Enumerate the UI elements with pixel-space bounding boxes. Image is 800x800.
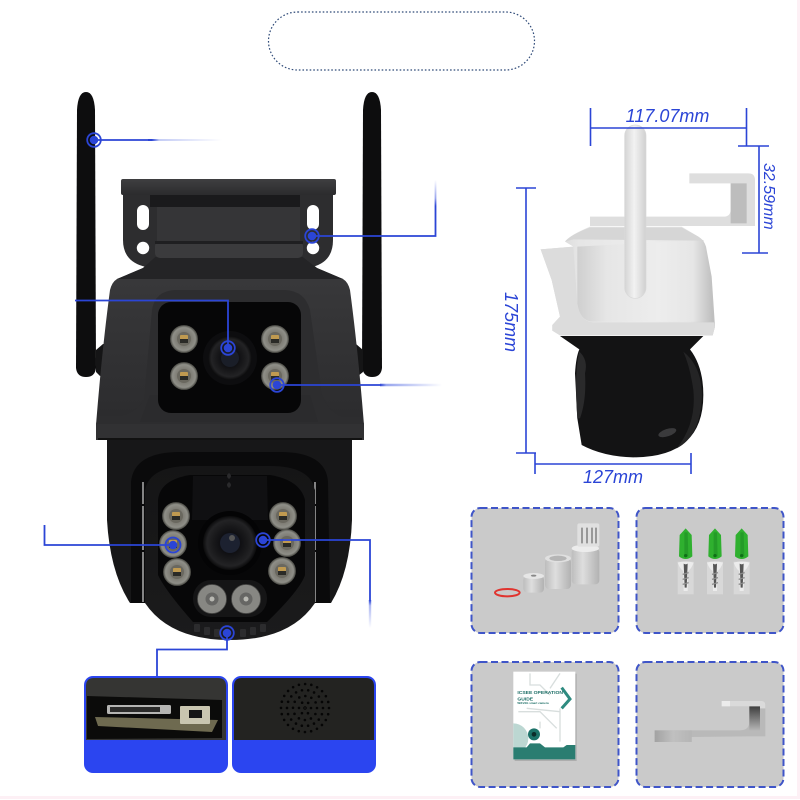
dimension: bracket depth [738,146,777,253]
marker: upper LED [270,378,284,392]
detail photo: memory card slot [84,676,228,773]
accessory panel: waterproof connector kit [472,508,618,633]
side bracket [590,173,755,226]
side antenna [625,125,646,298]
dimension: top width: 117.07mm [626,106,709,126]
side speaker hole [657,426,677,439]
accessory panel: wall anchors and screws [636,508,784,633]
left antenna [76,92,96,377]
dimension: bracket depth: 32.59mm [760,163,777,230]
callout lines and markers [44,133,442,676]
accessory panel: operation guide [472,662,618,787]
marker: lower LED [166,538,180,552]
accessory panel: operation guide: GUIDE [517,696,534,702]
marker: bracket [305,229,319,243]
side black dome [560,336,703,457]
detail photo: speaker grille [232,676,376,773]
lower dome housing [107,440,352,640]
marker: lower lens [256,533,270,547]
marker: upper lens [221,341,235,355]
right antenna [362,92,382,377]
side white housing [541,227,715,335]
mounting bracket [121,179,336,267]
dimension: top width [590,106,747,146]
marker: antenna [87,133,101,147]
main camera: front view [76,92,382,640]
marker: bottom slot [220,626,234,640]
dimension: height [501,188,536,453]
title placeholder: dotted pill [268,12,534,70]
dimension: width: 127mm [583,467,643,487]
side view of camera with dimensions [541,125,755,457]
upper body [96,241,364,440]
accessory panel: operation guide: WiFi/4G smart camera [517,701,549,705]
dimension: height: 175mm [501,292,521,352]
accessory panel: operation guide: ICSEE OPERATION [517,690,563,696]
antenna joints [96,344,363,376]
dimension: width [535,453,691,487]
accessory panel: mounting bracket [636,662,784,787]
upper lens window [158,302,301,413]
